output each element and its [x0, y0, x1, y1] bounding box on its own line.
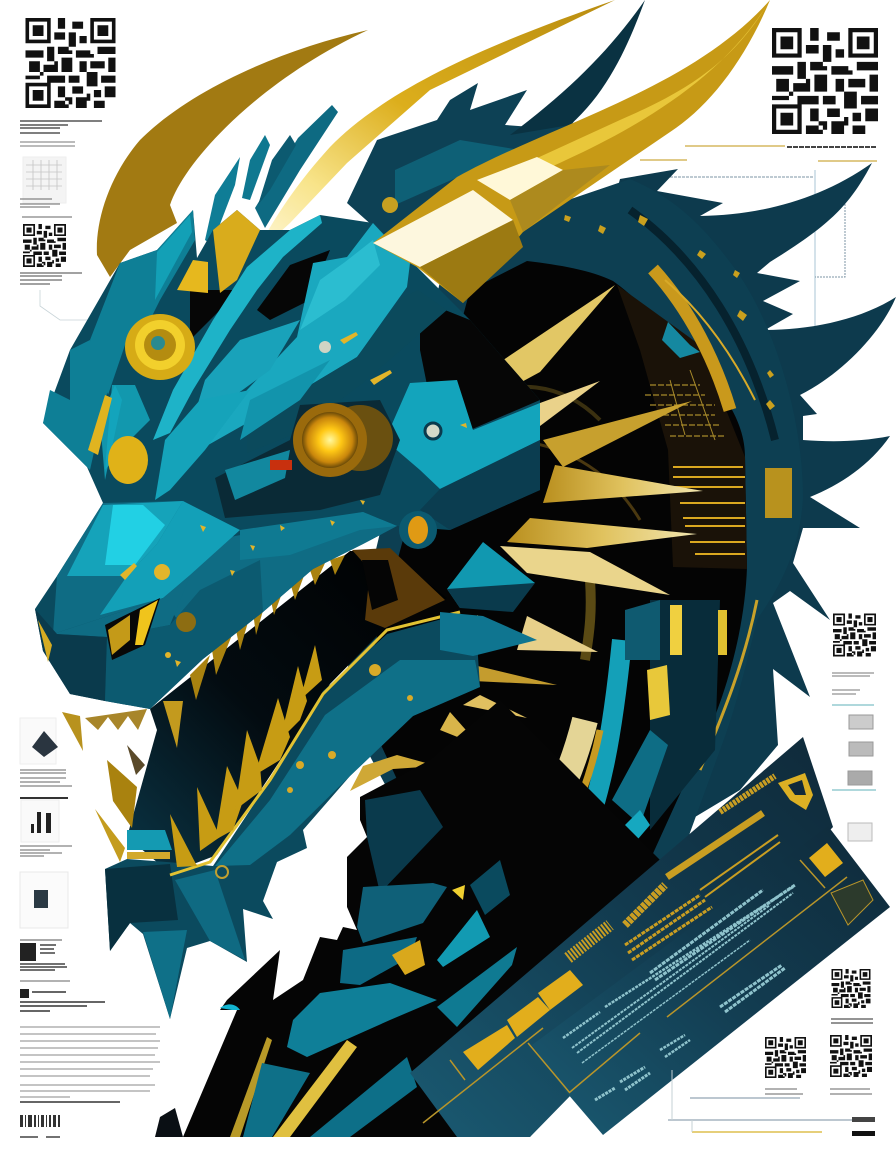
card lower panel: [532, 826, 890, 1135]
card upper panel: [410, 737, 833, 1137]
small orange disc: [399, 511, 437, 549]
teal pyramid fin: [447, 542, 535, 612]
head plates: [35, 210, 540, 709]
cyan plate right of eye: [385, 380, 540, 489]
body paragraph: [20, 1027, 160, 1097]
eye glow: [270, 403, 393, 477]
neck plates: [365, 790, 443, 893]
square emblem: [831, 880, 873, 925]
eye socket: [215, 400, 400, 518]
bottom right qr codes: [765, 969, 872, 1078]
upper teeth: [62, 555, 345, 862]
ring mechanical blocks: [487, 215, 792, 925]
horn right: [373, 0, 770, 303]
connector and rule lines top right: [40, 146, 877, 326]
snout: [53, 501, 397, 659]
ring inner dark: [360, 261, 747, 1000]
golden spikes: [350, 285, 703, 791]
left column plates: [90, 210, 195, 395]
mouth interior: [127, 548, 447, 873]
lower neck armor: [155, 700, 660, 1137]
inner throat brown mechanism: [352, 548, 445, 628]
card gold header bars: [568, 776, 780, 960]
figure 1 diamond: [20, 718, 58, 764]
dragon back crest spikes: [560, 163, 896, 850]
bottom right lines: [668, 1019, 875, 1136]
dragon top dorsal spikes: [347, 0, 645, 235]
left figures column: [20, 718, 160, 1137]
snout nostril: [105, 598, 160, 660]
jaw lit plates: [215, 660, 480, 866]
card gold rules: [423, 860, 847, 1123]
compact logo block: [20, 943, 67, 970]
right text lines and tiles: [832, 673, 876, 841]
grid panel: [617, 285, 747, 569]
head base: [35, 210, 540, 709]
jaw yellow rim: [170, 612, 460, 875]
gold oval: [108, 436, 148, 484]
qr code small left: [23, 224, 66, 267]
card cyan text lines: [563, 885, 795, 1100]
yellow blocks: [463, 843, 843, 1070]
left text below qr: [20, 273, 82, 284]
lower teeth: [170, 645, 322, 867]
forehead plates: [187, 223, 410, 457]
ring arcs: [480, 210, 775, 895]
right side small qr: [833, 614, 876, 656]
gold panels: [213, 210, 260, 293]
left top text blocks: [20, 121, 102, 217]
gold forehead disc: [125, 314, 195, 380]
teal fin lower: [440, 612, 537, 656]
thin crown spikes: [205, 105, 338, 245]
qr code top right: [772, 28, 878, 134]
golden circuitry grid: [645, 370, 745, 554]
teal jaw side rivets: [216, 664, 413, 878]
mechanical neck ring: [340, 179, 803, 1000]
figure 3 hex: [20, 872, 68, 928]
side rivet: [425, 423, 441, 439]
mechanical dark behind plates: [420, 300, 540, 430]
horn middle: [255, 0, 615, 255]
figure 2 bars: [21, 800, 59, 842]
lower jaw: [105, 612, 480, 1019]
qr code top left: [26, 18, 116, 108]
barcode: [20, 1115, 60, 1127]
bright arc plate: [153, 215, 322, 440]
data card: [410, 737, 890, 1137]
shield emblem: [778, 773, 813, 810]
text header: [20, 989, 105, 1011]
gold details: [120, 197, 478, 667]
horn left: [97, 30, 368, 277]
small table figure: [23, 157, 66, 203]
